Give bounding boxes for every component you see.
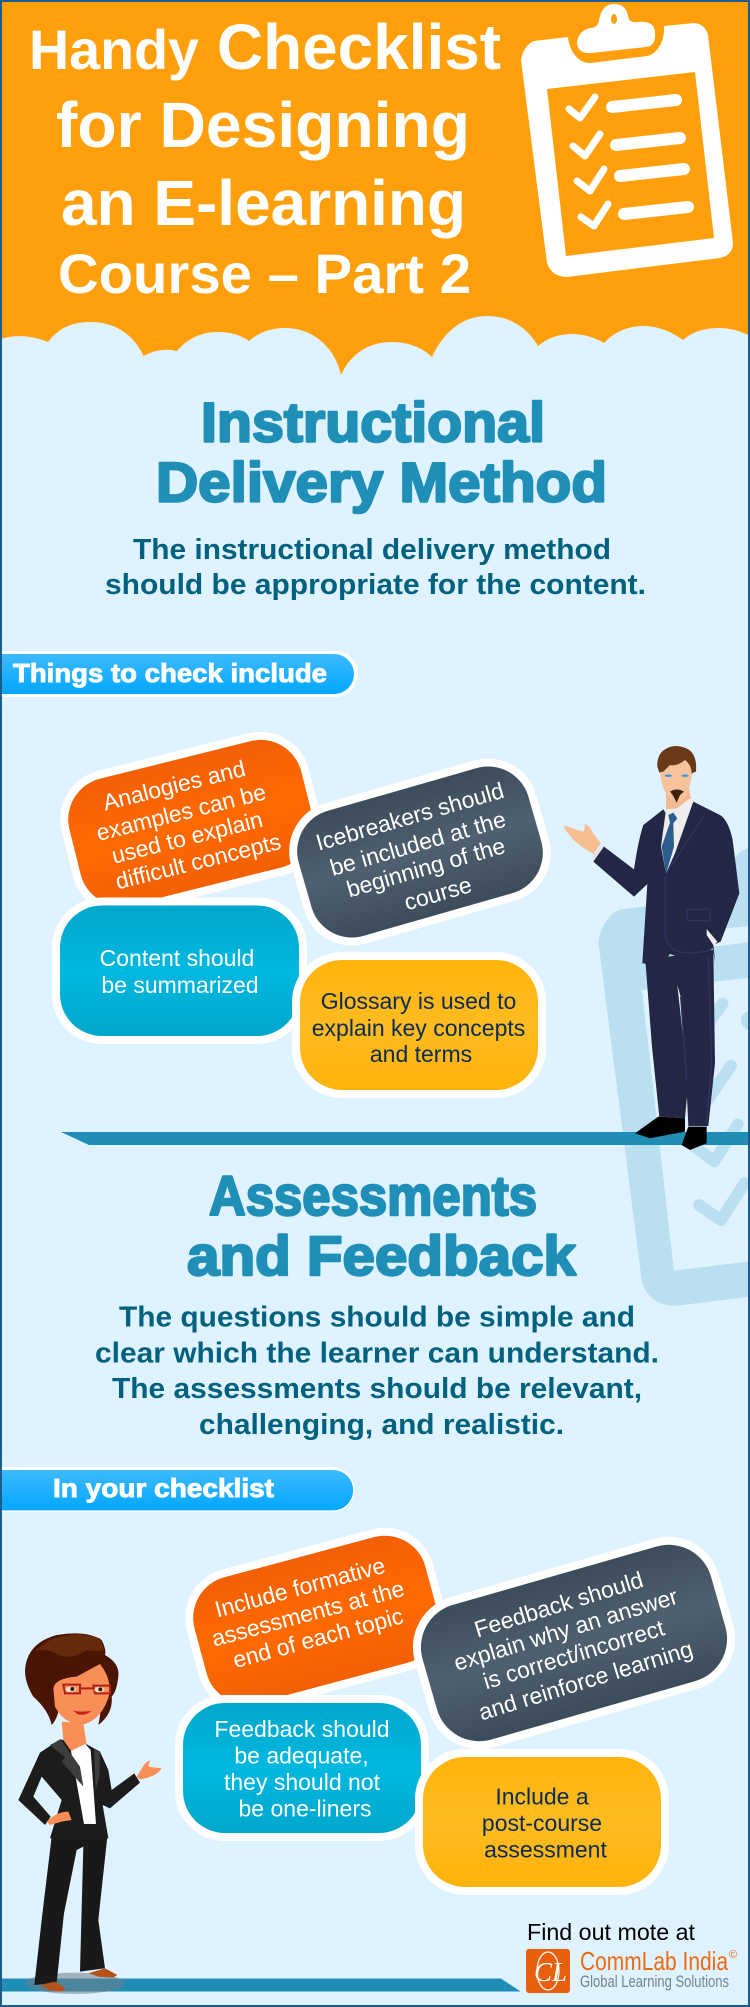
panel: assessment bubbles (183, 1526, 737, 1887)
heading: Instructional Delivery Method (156, 390, 607, 514)
bubble: feedback explanation (411, 1534, 737, 1752)
heading: Instructional Delivery Method: Instructional (201, 390, 545, 454)
bubble: feedback explanation: and reinforce learning (475, 1635, 696, 1725)
title: Course – Part 2 (58, 242, 471, 305)
bubble: glossary: Glossary is used to (321, 988, 516, 1014)
floor band 2 (0, 1978, 520, 1992)
bubble: glossary (300, 960, 538, 1090)
heading: Assessments and Feedback: and Feedback (187, 1224, 577, 1287)
text block: assessments intro: challenging, and realistic. (199, 1409, 564, 1441)
text block: assessments intro (95, 1302, 659, 1441)
bubble: feedback adequate: be adequate, (234, 1742, 369, 1768)
bubble: post-course assessment: Include a (495, 1784, 589, 1810)
heading: Assessments and Feedback (187, 1164, 577, 1287)
bubble: feedback explanation: is correct/incorrect (480, 1614, 668, 1694)
bubble: icebreakers: be included at the (327, 806, 509, 881)
title: for Designing (56, 89, 470, 161)
bubble: analogies (59, 731, 323, 915)
bubble: content summarized (60, 906, 299, 1036)
watermark: large clipboard (598, 847, 750, 1306)
bubble: feedback adequate (183, 1703, 421, 1833)
character: man in suit (563, 746, 739, 1150)
bubble: icebreakers: Icebreakers should (313, 777, 507, 856)
bubble: feedback explanation: Feedback should (471, 1566, 646, 1642)
bubble: formative assessments: Include formative (212, 1552, 388, 1622)
pill: In your checklist (0, 1467, 354, 1512)
character: woman with glasses (18, 1633, 162, 1994)
bubble: analogies: used to explain (109, 806, 265, 869)
pill: Things to check include: Things to check include (13, 658, 327, 688)
text: find out more: Find out mote at (527, 1919, 696, 1945)
bubble: content summarized: be summarized (101, 972, 259, 998)
bubble: analogies: difficult concepts (113, 828, 284, 894)
bubble: formative assessments: assessments at the (209, 1575, 407, 1651)
bubble: icebreakers (287, 757, 553, 947)
bubble: post-course assessment: post-course (482, 1810, 602, 1836)
logo: CommLab India: CL (534, 1957, 567, 1987)
bubble: post-course assessment: assessment (484, 1836, 607, 1862)
logo: CommLab India: © (729, 1949, 737, 1961)
heading: Assessments and Feedback: Assessments (209, 1164, 537, 1227)
title: an E-learning (61, 167, 466, 239)
bubble: feedback adequate: Feedback should (214, 1716, 390, 1742)
bubble: formative assessments (184, 1526, 448, 1714)
title: Handy (29, 18, 199, 81)
icon: clipboard (521, 4, 733, 277)
heading: Instructional Delivery Method: Delivery Method (156, 450, 607, 514)
bubble: post-course assessment (423, 1757, 661, 1887)
text block: assessments intro: The assessments should be relevant, (112, 1373, 642, 1405)
bubble: glossary: and terms (370, 1041, 472, 1067)
text block: assessments intro: The questions should be simple and (119, 1302, 635, 1334)
bubble: feedback explanation: explain why an answer (451, 1583, 681, 1676)
text block: assessments intro: clear which the learner can understand. (95, 1338, 659, 1370)
bubble: content summarized: Content should (100, 945, 254, 971)
bubble: icebreakers: beginning of the (344, 832, 508, 902)
pill: In your checklist: In your checklist (53, 1473, 274, 1503)
bubble: analogies: Analogies and (100, 755, 248, 815)
text block: delivery method intro: should be appropriate for the content. (105, 569, 646, 601)
panel: delivery method bubbles (59, 731, 553, 1090)
header banner (0, 0, 750, 400)
bubble: analogies: examples can be (94, 779, 269, 846)
bubble: feedback adequate: be one-liners (239, 1796, 371, 1822)
floor band 1 (61, 1132, 750, 1145)
text block: delivery method intro (105, 534, 646, 601)
logo: CommLab India (526, 1946, 737, 1993)
title (29, 11, 501, 305)
bubble: feedback adequate: they should not (224, 1769, 381, 1795)
text block: delivery method intro: The instructional delivery method (133, 534, 611, 566)
bubble: formative assessments: end of each topic (230, 1603, 406, 1673)
bubble: icebreakers: course (401, 871, 475, 915)
title: Checklist (217, 11, 501, 83)
pill: Things to check include (0, 651, 358, 697)
bubble: glossary: explain key concepts (312, 1015, 525, 1041)
